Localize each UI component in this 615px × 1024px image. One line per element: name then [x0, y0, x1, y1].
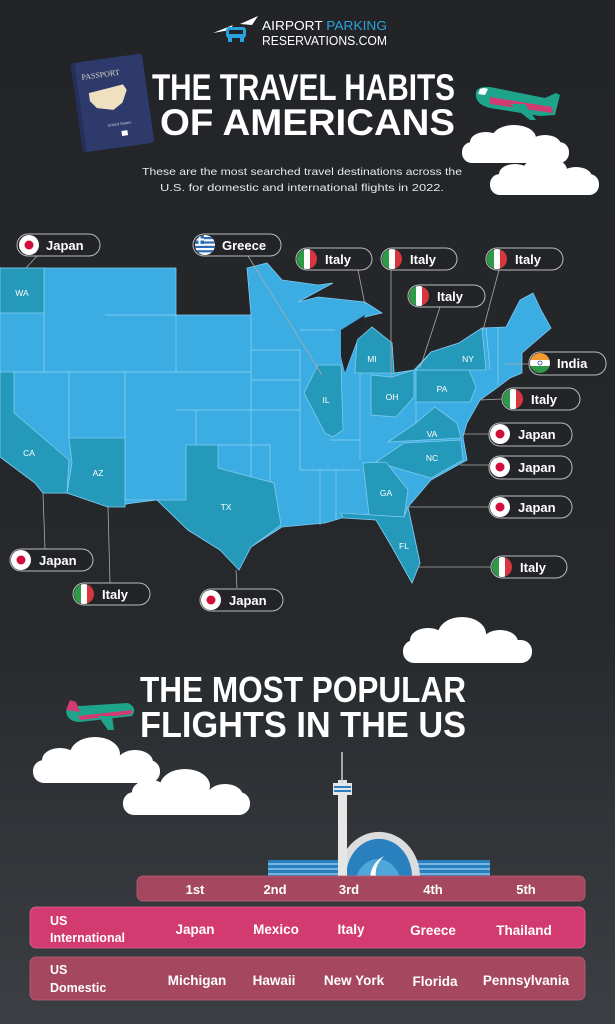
- logo: AIRPORT PARKING: [262, 19, 387, 33]
- pill: NC Japan: Japan: [518, 460, 556, 475]
- pill: PA Italy: [408, 285, 485, 307]
- pill: OH Italy: Italy: [410, 252, 437, 267]
- icon: winged car: [213, 16, 258, 42]
- pill: AZ Italy: Italy: [102, 587, 129, 602]
- pill: MI Italy: Italy: [325, 252, 352, 267]
- pill: India: India: [557, 356, 588, 371]
- row: US International: Mexico: [253, 922, 299, 937]
- icon: passport: PASSPORT: [81, 68, 120, 82]
- state labels: IL: [322, 395, 330, 405]
- pill: PA Italy: Italy: [437, 289, 464, 304]
- subtitle: These are the most searched travel destinations across the: [142, 166, 462, 178]
- pill: MI Italy: [296, 248, 372, 270]
- row: US Domestic: Domestic: [50, 981, 106, 995]
- pill: AZ Italy: [73, 583, 150, 605]
- clouds left: [33, 737, 250, 815]
- row: US International: Thailand: [496, 923, 552, 938]
- row: US International: US: [50, 914, 67, 928]
- subtitle: U.S. for domestic and international flights in 2022.: [160, 182, 444, 194]
- pill: IL Greece: [193, 234, 281, 256]
- header row: ranks: 5th: [516, 882, 536, 897]
- row: US International: Japan: [175, 922, 215, 937]
- leader lines: [26, 256, 529, 588]
- pill: OH Italy: [381, 248, 457, 270]
- pill: VA Japan: Japan: [518, 427, 556, 442]
- pill: GA Japan: Japan: [518, 500, 556, 515]
- row: US Domestic: [30, 957, 585, 1000]
- pill: India: [529, 352, 606, 375]
- row: US Domestic: Pennsylvania: [483, 973, 570, 988]
- state labels: FL: [399, 541, 409, 551]
- row: US International: Italy: [337, 922, 365, 937]
- state labels: NY: [462, 354, 474, 364]
- table: popular flights: [30, 876, 585, 1000]
- state labels: MI: [367, 354, 377, 364]
- heading: most popular flights: [140, 669, 466, 745]
- state labels: TX: [221, 502, 232, 512]
- pill: FL Italy: [491, 556, 567, 578]
- state labels: AZ: [93, 468, 103, 478]
- state borders: [14, 268, 498, 525]
- pill: TX Japan: Japan: [229, 593, 267, 608]
- pill: FL Italy: Italy: [520, 560, 547, 575]
- icon: passport: United States: [107, 120, 132, 128]
- title: OF AMERICANS: [160, 102, 455, 143]
- pill: CA Japan: [10, 549, 93, 571]
- row: US Domestic: Hawaii: [253, 973, 295, 988]
- state labels: CA: [23, 448, 35, 458]
- dark states: [0, 268, 486, 583]
- title: [152, 67, 455, 143]
- icon: airport building: [268, 752, 490, 877]
- state labels: NC: [426, 453, 438, 463]
- header row: ranks: 1st: [186, 882, 205, 897]
- pill: CA Japan: Japan: [39, 553, 77, 568]
- row: US Domestic: Florida: [412, 974, 458, 989]
- row: US International: International: [50, 931, 125, 945]
- map: USA: [0, 263, 551, 583]
- row: US International: Greece: [410, 923, 456, 938]
- state labels: VA: [427, 429, 438, 439]
- row: US Domestic: US: [50, 963, 67, 977]
- labels: destination pills: [10, 234, 606, 611]
- pill: NJ Italy: [502, 388, 580, 410]
- pill: IL Greece: Greece: [222, 238, 266, 253]
- icon: plane top: [476, 87, 560, 120]
- pill: WA Japan: [17, 234, 100, 256]
- pill: GA Japan: [489, 496, 572, 518]
- row: US Domestic: New York: [324, 973, 385, 988]
- subtitle: [142, 166, 462, 194]
- header row: ranks: 3rd: [339, 882, 359, 897]
- title: THE TRAVEL HABITS: [152, 67, 455, 108]
- clouds top: [462, 125, 599, 195]
- state labels: WA: [15, 288, 29, 298]
- header row: ranks: 4th: [423, 882, 443, 897]
- icon: passport: [71, 53, 154, 153]
- pill: NC Japan: [489, 456, 572, 479]
- header row: ranks: 2nd: [263, 882, 287, 897]
- lake michigan: [341, 315, 365, 373]
- row: US International: [30, 907, 585, 948]
- cloud mid right: [403, 617, 532, 663]
- pill: VA Japan: [489, 423, 572, 446]
- header row: ranks: [137, 876, 585, 901]
- state labels: [15, 288, 474, 551]
- row: US Domestic: Michigan: [168, 973, 226, 988]
- logo: [213, 16, 387, 48]
- pill: NY Italy: Italy: [515, 252, 542, 267]
- state labels: OH: [386, 392, 398, 402]
- logo: RESERVATIONS.COM: [262, 34, 387, 48]
- pill: NJ Italy: Italy: [531, 392, 558, 407]
- pill: WA Japan: Japan: [46, 238, 84, 253]
- icon: plane left: [66, 700, 134, 730]
- pill: NY Italy: [486, 248, 563, 270]
- state labels: GA: [380, 488, 392, 498]
- heading: most popular flights: THE MOST POPULAR: [140, 669, 466, 710]
- heading: most popular flights: FLIGHTS IN THE US: [140, 704, 466, 745]
- pill: TX Japan: [200, 589, 283, 611]
- state labels: PA: [437, 384, 448, 394]
